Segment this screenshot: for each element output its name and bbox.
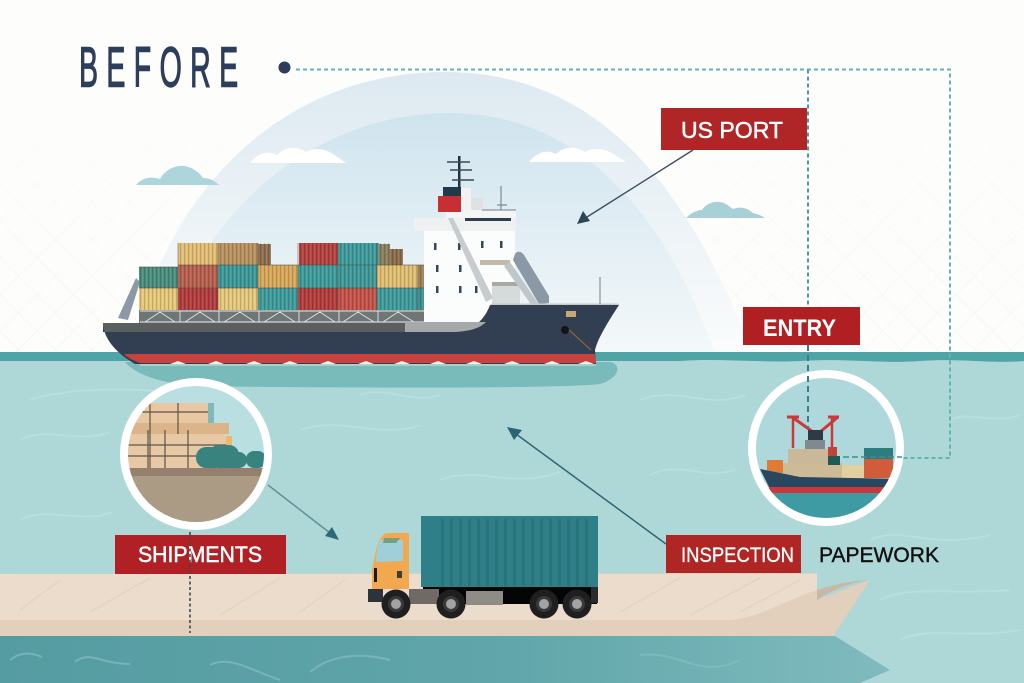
connector: lines over entry circle [808,376,902,457]
cloud: teal left [136,166,219,185]
superstructure [414,156,549,324]
chassis [423,587,597,604]
cloud: teal right [686,202,765,218]
connector: dotted route [296,70,950,458]
backdrop [128,386,264,522]
arrow: warehouse to truck [268,485,339,540]
cloud: white left [250,148,346,163]
stern crane [118,278,140,320]
foam [140,361,596,366]
cargo ship [103,156,619,366]
gangway stairs [448,218,493,302]
label: PAPEWORK: PAPEWORK [819,544,939,567]
water [0,352,1024,683]
dock [0,573,870,636]
cranes [787,417,839,456]
label: INSPECTION [666,535,801,573]
cab [368,533,409,602]
containers [139,243,424,310]
small ship cargo [767,430,893,478]
label: INSPECTION: INSPECTION [681,544,794,567]
windows [434,241,502,293]
green bales [196,445,266,468]
hull [103,305,619,364]
arrow: US port to ship [577,150,693,224]
deck lattice [103,310,424,332]
ship reflection [125,362,617,388]
arrow: inspection to water [507,427,666,544]
small hull [760,469,900,487]
wheels [382,590,592,618]
side crane [513,252,549,304]
label: SHIPMENTS: SHIPMENTS [138,542,262,567]
sky dome [130,72,752,353]
title dot [278,62,290,74]
label: US PORT [661,108,807,150]
label: SHIPMENTS [115,535,286,574]
title: BEFORE [79,35,247,99]
anchor [561,311,591,350]
truck [368,516,598,618]
label: ENTRY [743,307,860,345]
circle: port entry ship [748,370,905,528]
circle: shipments warehouse [120,378,272,532]
truck container [421,516,598,587]
stacked crates [128,403,232,469]
lower water [0,636,890,683]
label: ENTRY: ENTRY [763,315,836,342]
dotted drop line [189,532,191,633]
label: US PORT: US PORT [681,117,783,143]
grey deck [405,322,486,332]
boot stripe [124,354,596,363]
cloud: white right [529,148,626,162]
